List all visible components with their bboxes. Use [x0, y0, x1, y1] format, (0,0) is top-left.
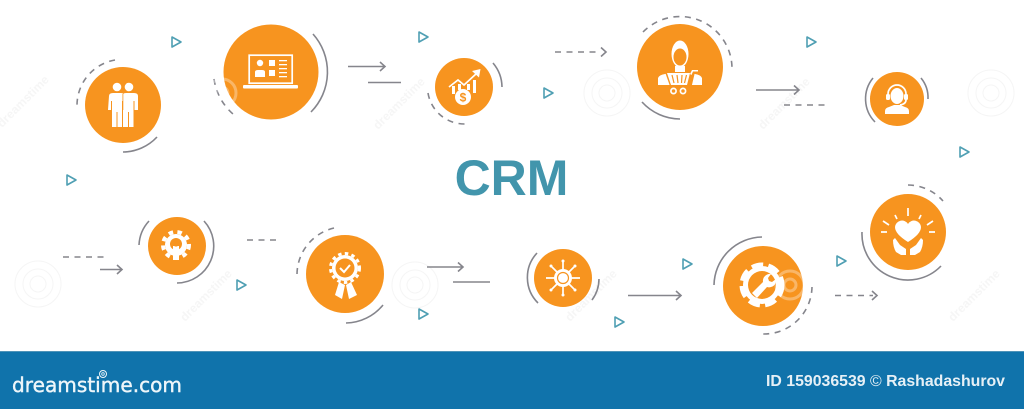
arrow: solid with dashes, node 4 to 5 [756, 86, 826, 105]
node 1: people [77, 60, 161, 152]
arrow: dashed, node 9 to 10 [835, 291, 877, 300]
icon: headset agent [885, 85, 909, 114]
node 10: heart in hands [862, 185, 946, 280]
icon: rosette with check [330, 254, 360, 299]
connector: dashes, node 6 to 7 [247, 239, 277, 241]
icon: heart held by hands [881, 208, 935, 255]
node 7: award badge [297, 228, 384, 323]
watermark: faint stock-photo marks: dreamstime [562, 266, 620, 324]
arrow: dashed, node 3 to 4 [555, 51, 601, 53]
logo: dreamstime.com: dreamstime.com [12, 373, 182, 397]
node 2: laptop [214, 24, 327, 120]
icon: two people [108, 83, 138, 127]
node 9: gear with wrench [714, 237, 812, 334]
arrow: dashes and solid, into node 6 [63, 257, 122, 274]
title: CRM [455, 150, 568, 206]
node 8: network wheel [527, 249, 599, 307]
arrow: solid with separate line, node 2 to 3 [348, 62, 401, 82]
triangle markers [67, 32, 969, 327]
icon: gear and wrench [163, 232, 189, 260]
icon: man with cart [658, 40, 702, 94]
icon: wrench inside gear [742, 265, 782, 305]
arrowhead: dashed arrow tip [601, 48, 606, 56]
watermark: faint stock-photo marks: dreamstime [177, 266, 235, 324]
footer banner [0, 351, 1024, 409]
watermark: faint stock-photo marks: dreamstime [370, 74, 428, 132]
watermark: faint stock-photo marks [0, 70, 1014, 324]
node 6: gear in wrench [139, 217, 214, 283]
watermark: faint stock-photo marks: dreamstime [945, 266, 1003, 324]
image id and credit: ID 159036539 © Rashadashurov [766, 373, 1005, 390]
watermark: faint stock-photo marks: dreamstime [755, 74, 813, 132]
icon: rising chart and dollar coin: $ [460, 90, 467, 104]
icon: laptop with profile cards [243, 55, 298, 88]
icon: hub with spokes [546, 260, 580, 296]
arrow: solid with line, node 7 to 8 [427, 262, 490, 282]
node 4: customer with shopping cart [637, 17, 732, 119]
node 5: support agent [866, 72, 928, 126]
node 3: finance growth [428, 58, 502, 124]
arrow: solid, node 8 to 9 [628, 291, 681, 300]
watermark spirals over circles [208, 79, 804, 299]
